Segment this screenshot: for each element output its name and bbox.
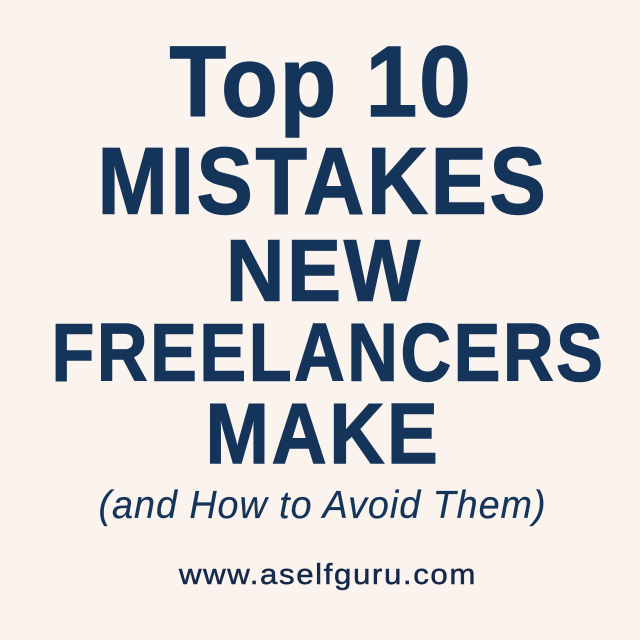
subtitle: (and How to Avoid Them) — [98, 484, 546, 527]
title line: Top 10: Top 10 — [170, 26, 472, 138]
title line: MISTAKES: MISTAKES — [98, 128, 548, 234]
title — [52, 26, 606, 482]
title line: MAKE: MAKE — [206, 387, 440, 482]
website url: www.aselfguru.com — [178, 559, 477, 591]
title line: NEW: NEW — [226, 222, 423, 320]
